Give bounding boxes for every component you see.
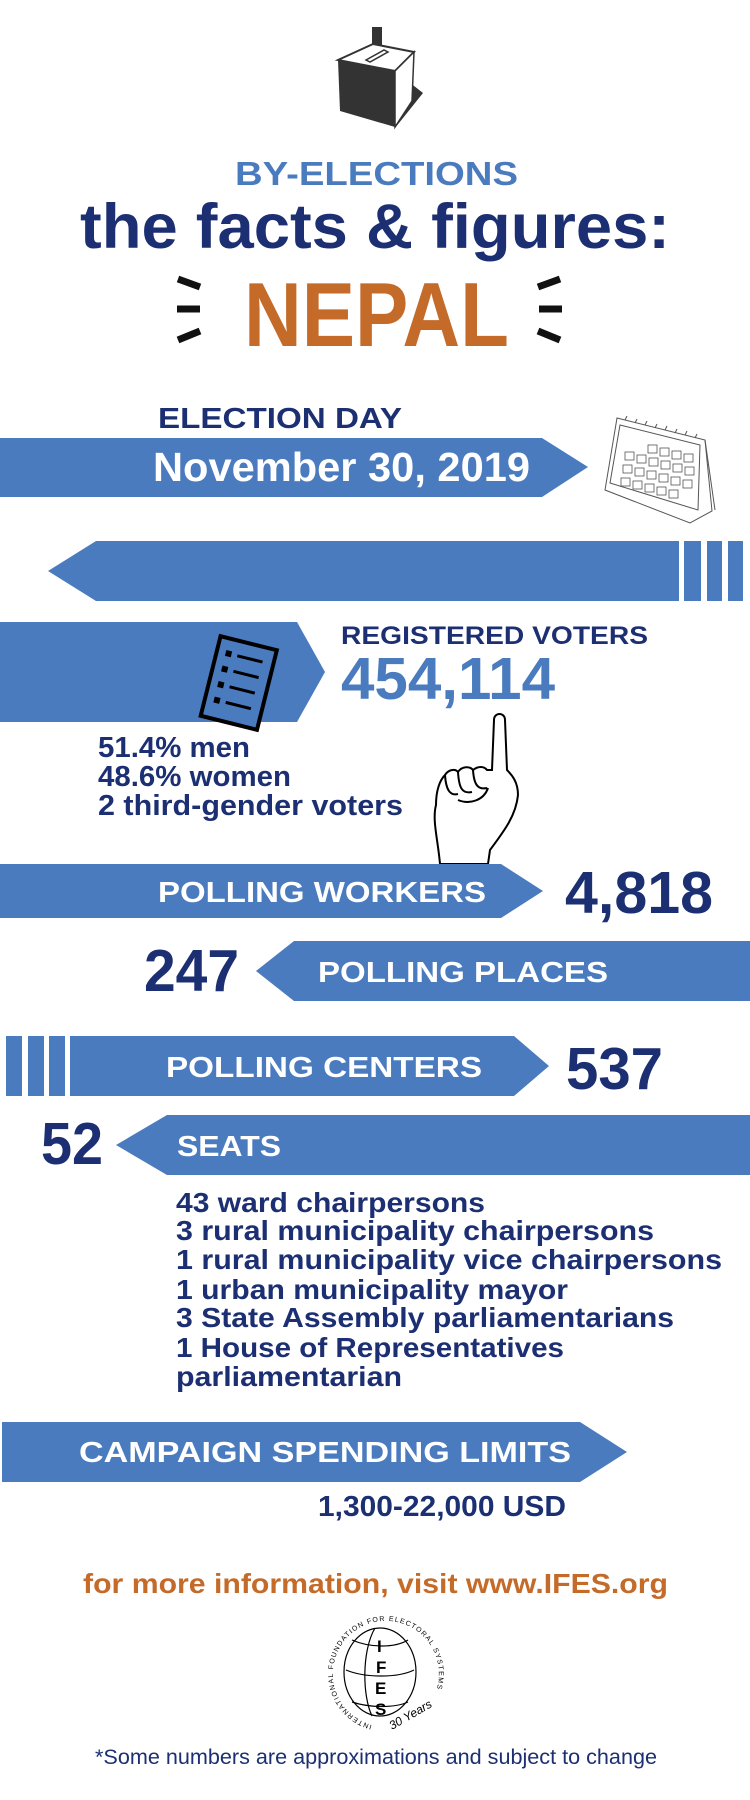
number: seats: 52 xyxy=(41,1111,103,1177)
banner: seats: SEATS xyxy=(177,1131,281,1163)
icon: ballot box xyxy=(338,27,423,128)
banner: election date: November 30, 2019 xyxy=(153,444,530,490)
text: spending amount: 1,300-22,000 USD xyxy=(318,1491,566,1523)
text block: seats breakdown: 1 rural municipality vice chairpersons xyxy=(176,1244,722,1275)
title: the facts & figures: xyxy=(80,192,670,262)
banner: polling centers: POLLING CENTERS xyxy=(166,1052,482,1084)
banner: election date xyxy=(0,438,588,497)
text block: seats breakdown: 1 House of Representatives xyxy=(176,1332,564,1363)
heading: REGISTERED VOTERS: REGISTERED VOTERS xyxy=(341,622,648,650)
subtitle: BY-ELECTIONS: BY-ELECTIONS xyxy=(235,155,518,192)
number: polling centers: 537 xyxy=(566,1036,663,1102)
text block: seats breakdown: parliamentarian xyxy=(176,1361,402,1392)
number: polling workers: 4,818 xyxy=(565,860,713,926)
text block: seats breakdown: 43 ward chairpersons xyxy=(176,1187,485,1218)
banner: polling workers xyxy=(0,864,543,918)
logo: IFES: I xyxy=(377,1637,382,1656)
text block: voter breakdown: 2 third-gender voters xyxy=(98,790,403,822)
logo: IFES: E xyxy=(375,1679,386,1698)
banner: campaign spending limits: CAMPAIGN SPENDING LIMITS xyxy=(79,1437,571,1469)
banner: campaign spending limits xyxy=(2,1422,627,1482)
banner: left arrow with stripes xyxy=(48,541,743,601)
banner: registered voters xyxy=(0,622,325,722)
icon: calendar xyxy=(605,416,715,523)
text: more information: for more information, visit www.IFES.org xyxy=(83,1568,668,1599)
icon: raised finger hand xyxy=(435,714,518,864)
text block: seats breakdown: 1 urban municipality mayor xyxy=(176,1274,568,1305)
logo: IFES: S xyxy=(375,1700,386,1719)
icon: voter list document xyxy=(201,636,277,730)
banner: polling centers xyxy=(6,1036,549,1096)
text block: seats breakdown xyxy=(176,1187,722,1392)
text block: seats breakdown: 3 rural municipality chairpersons xyxy=(176,1215,654,1246)
footnote: *Some numbers are approximations and subject to change xyxy=(95,1746,657,1769)
logo: IFES: INTERNATIONAL FOUNDATION FOR ELECTORAL SYSTEMS xyxy=(328,1616,444,1730)
heading: ELECTION DAY: ELECTION DAY xyxy=(158,403,402,435)
banner: seats xyxy=(116,1115,750,1175)
title: NEPAL with dashes: NEPAL xyxy=(244,265,509,366)
text block: seats breakdown: 3 State Assembly parliamentarians xyxy=(176,1302,674,1333)
logo: IFES: 30 Years xyxy=(386,1697,434,1733)
banner: polling places xyxy=(256,941,750,1001)
text block: voter breakdown xyxy=(98,732,403,822)
text block: voter breakdown: 48.6% women xyxy=(98,761,291,793)
number: registered voters: 454,114 xyxy=(341,646,555,712)
banner: polling places: POLLING PLACES xyxy=(318,957,608,989)
text block: voter breakdown: 51.4% men xyxy=(98,732,250,764)
number: polling places: 247 xyxy=(144,938,239,1004)
logo: IFES: F xyxy=(376,1658,386,1677)
banner: polling workers: POLLING WORKERS xyxy=(158,877,486,909)
